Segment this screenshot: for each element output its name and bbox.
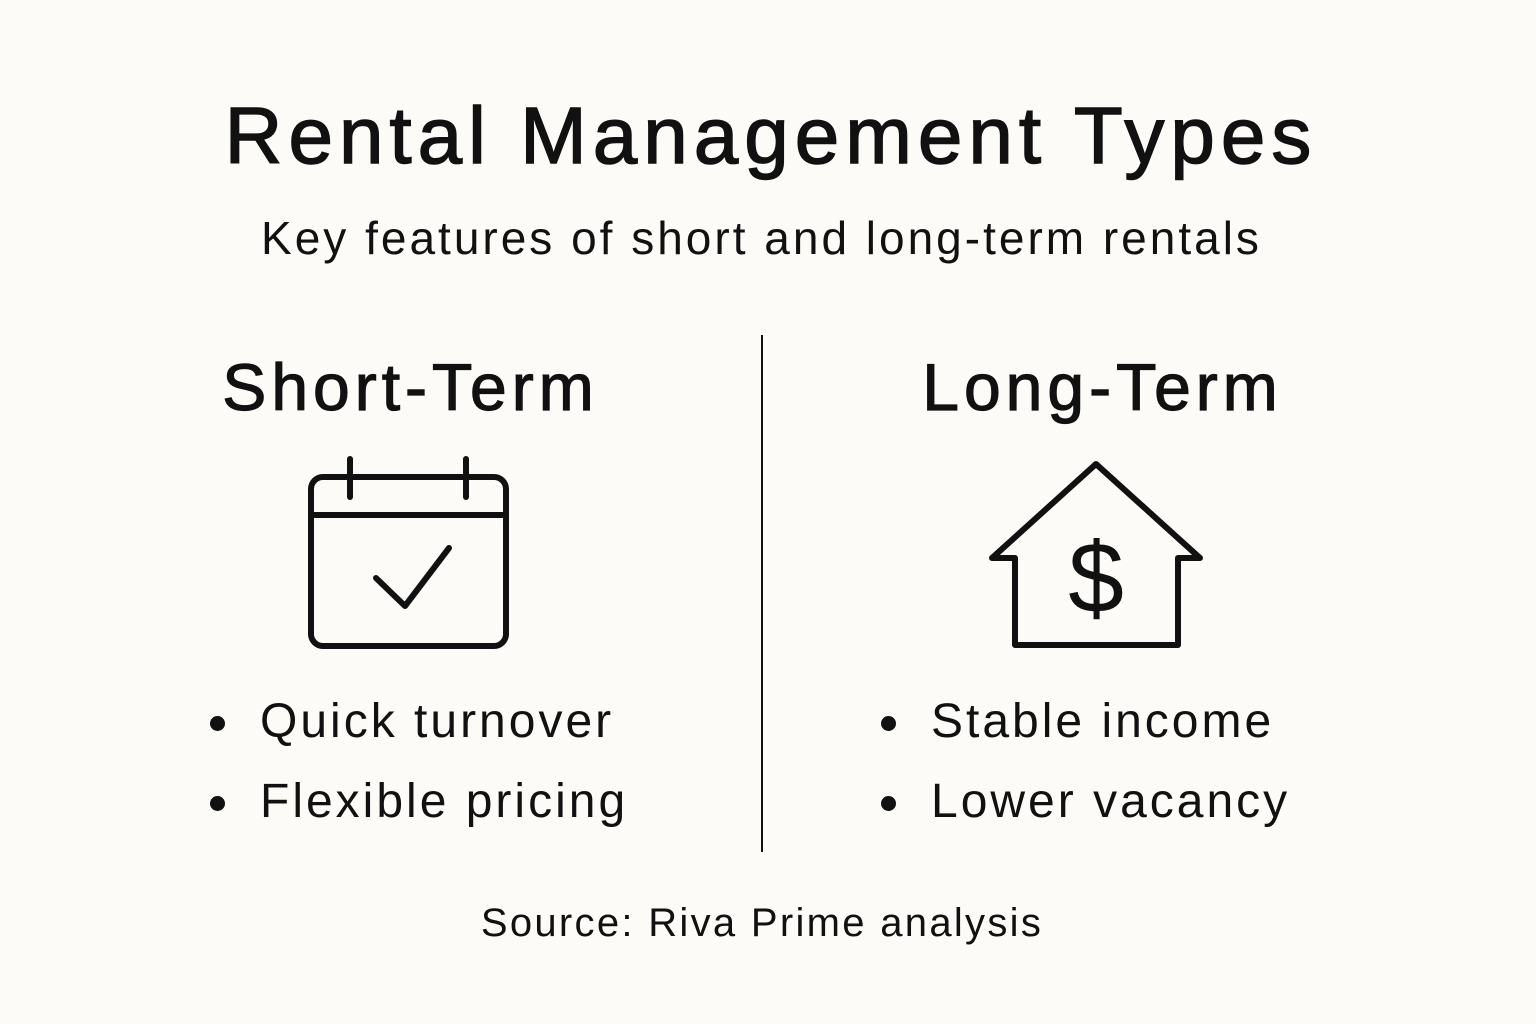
- panel: long-term: [881, 350, 1290, 828]
- panel: long-term: Stable income: [931, 695, 1274, 748]
- divider: [761, 335, 763, 852]
- panel: short-term: Quick turnover: [260, 695, 614, 748]
- icon: house with dollar: [989, 461, 1203, 648]
- icon: calendar: [308, 456, 509, 649]
- heading: long-term: Long-Term: [922, 350, 1283, 424]
- heading: short-term: Short-Term: [222, 350, 599, 424]
- icon: house with dollar: $: [1068, 522, 1124, 634]
- title: Rental Management Types: [225, 91, 1317, 180]
- subtitle: Key features of short and long-term rentals: [261, 212, 1262, 264]
- panel: long-term: Lower vacancy: [931, 775, 1290, 828]
- panel: short-term: [210, 350, 628, 828]
- source note: Source: Riva Prime analysis: [481, 901, 1043, 945]
- panel: short-term: Flexible pricing: [260, 775, 628, 828]
- bullet list: short-term: [210, 695, 628, 828]
- bullet list: long-term: [881, 695, 1290, 828]
